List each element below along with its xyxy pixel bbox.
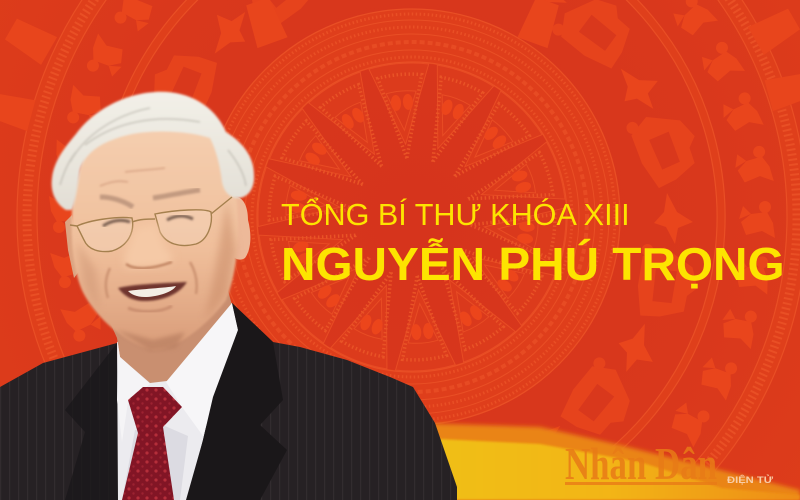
eyebrows xyxy=(100,190,200,207)
left ear xyxy=(65,215,80,278)
tie xyxy=(122,387,182,500)
subtitle: TỔNG BÍ THƯ KHÓA XIII xyxy=(281,197,630,232)
face xyxy=(72,122,238,350)
portrait xyxy=(0,92,457,500)
eyes xyxy=(103,216,193,226)
yellow ribbon xyxy=(420,423,800,500)
hair strands xyxy=(60,108,246,186)
hair xyxy=(52,92,254,210)
neck xyxy=(100,280,232,383)
right ear xyxy=(229,197,250,260)
nose xyxy=(124,224,174,268)
drum inner scene: boats and flying birds xyxy=(118,0,705,490)
glasses xyxy=(70,197,232,252)
jaw shadows xyxy=(76,200,236,351)
nasolabial folds xyxy=(106,262,197,298)
collar xyxy=(117,303,238,500)
watermark: Nhân Dân logo: ĐIỆN TỬ xyxy=(727,474,773,486)
title name: NGUYỄN PHÚ TRỌNG xyxy=(281,238,785,290)
forehead lines xyxy=(100,168,165,186)
watermark: Nhân Dân logo: Nhân Dân xyxy=(565,438,717,489)
drum star triangles xyxy=(255,61,569,373)
drum corner feathers xyxy=(0,0,800,131)
suit xyxy=(0,303,457,500)
mouth xyxy=(118,282,187,312)
shirt xyxy=(117,303,238,500)
lapel xyxy=(186,303,287,500)
